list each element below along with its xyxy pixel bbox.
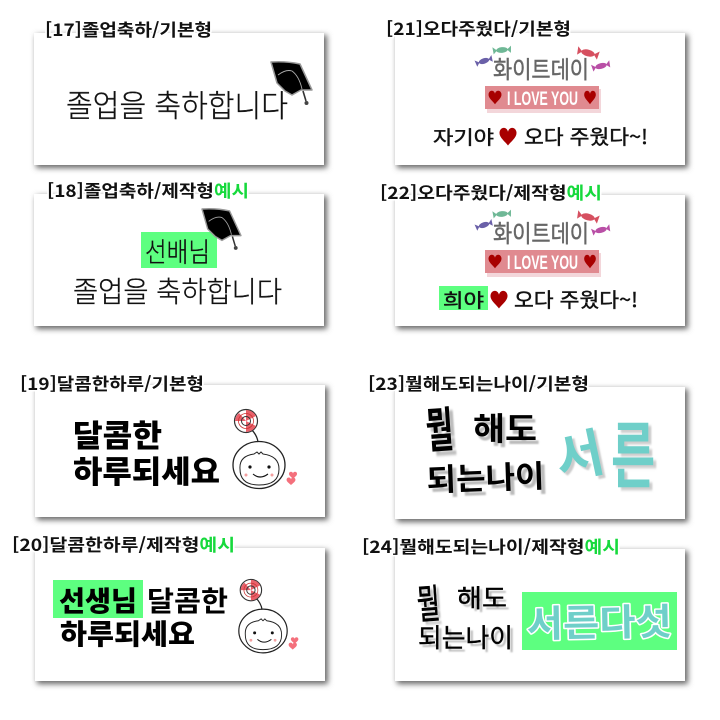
text: anything goes: 해도 — [457, 579, 507, 615]
text: anything goes: 해도 — [473, 404, 537, 450]
panel: 18 graduation custom — [34, 177, 327, 329]
heading: 22: [22]오다주웠다/제작형 예시 — [380, 179, 602, 204]
text: anything goes: 되는나이 — [421, 621, 516, 658]
text: anything goes: 되는나이 — [426, 451, 545, 500]
text: anything goes: 뭘 — [423, 391, 456, 462]
text: sweet: 달콤한 — [147, 580, 228, 620]
text: have a day: 하루되세요 — [73, 447, 220, 492]
highlight: teacher — [53, 580, 143, 618]
heading: 23: [23]뭘해도되는나이/기본형 — [368, 370, 589, 395]
heading: 20: [20]달콤한하루/제작형 예시 — [12, 531, 235, 556]
icon: lollipop girl — [239, 579, 298, 653]
text: thirty: 서 — [551, 413, 613, 497]
text: thirty — [548, 398, 658, 506]
text: heeya: 희야 — [443, 286, 484, 313]
icon: lollipop girl — [233, 410, 297, 488]
text: anything goes: 해도 — [460, 582, 510, 618]
text: anything goes — [415, 571, 516, 658]
panel: 24 thirty-five custom — [362, 533, 688, 684]
highlight: heeya — [439, 286, 488, 310]
text: thirty: 른 — [611, 398, 655, 503]
text: anything goes: 해도 — [476, 408, 540, 454]
panel: 21 white day basic — [386, 15, 688, 168]
icon: heart — [490, 291, 508, 308]
text: anything goes — [423, 391, 549, 504]
heading: 24: [24]뭘해도되는나이/제작형 예시 — [362, 533, 620, 558]
text: anything goes: 뭘 — [427, 395, 460, 466]
panel: 17 graduation basic — [34, 16, 327, 168]
text: have a day: 하루되세요 — [60, 613, 195, 653]
heading: 18: [18]졸업축하/제작형 예시 — [47, 177, 249, 202]
text: thirty: 서 — [548, 410, 610, 494]
heading: 19: [19]달콤한하루/기본형 — [20, 370, 204, 395]
text: honey: 자기야 — [433, 123, 494, 150]
text: teacher: 선생님 — [59, 580, 137, 620]
panel: 22 white day custom — [380, 179, 688, 329]
artwork: white day banner — [475, 210, 611, 277]
heading: 17: [17]졸업축하/기본형 — [45, 16, 212, 41]
panel: 23 thirty basic — [368, 370, 688, 522]
text: picked it up: 오다 주웠다~! — [524, 121, 648, 150]
text: congratulations: 졸업을 축하합니다 — [66, 81, 288, 126]
icon: heart — [499, 128, 517, 145]
text: anything goes: 뭘 — [415, 571, 442, 631]
icon: graduation cap — [202, 209, 241, 250]
text: anything goes: 되는나이 — [418, 618, 513, 655]
text: sweet: 달콤한 — [73, 411, 162, 456]
panel: 20 sweet day custom — [12, 531, 328, 684]
panel: 19 sweet day basic — [20, 370, 328, 520]
highlight: thirty-five — [522, 592, 677, 650]
artwork: white day banner — [475, 46, 611, 113]
text: thirty-five: 서른다섯 — [526, 591, 672, 648]
text: seonbae: 선배님 — [145, 231, 210, 270]
text: anything goes: 되는나이 — [430, 455, 549, 504]
text: thirty: 른 — [614, 401, 658, 506]
text: anything goes: 뭘 — [418, 574, 445, 634]
highlight: seonbae — [141, 232, 217, 268]
text: congratulations: 졸업을 축하합니다 — [73, 269, 282, 311]
heading: 21: [21]오다주웠다/기본형 — [386, 15, 571, 40]
icon: graduation cap — [271, 62, 312, 105]
text: picked it up: 오다 주웠다~! — [514, 284, 638, 313]
